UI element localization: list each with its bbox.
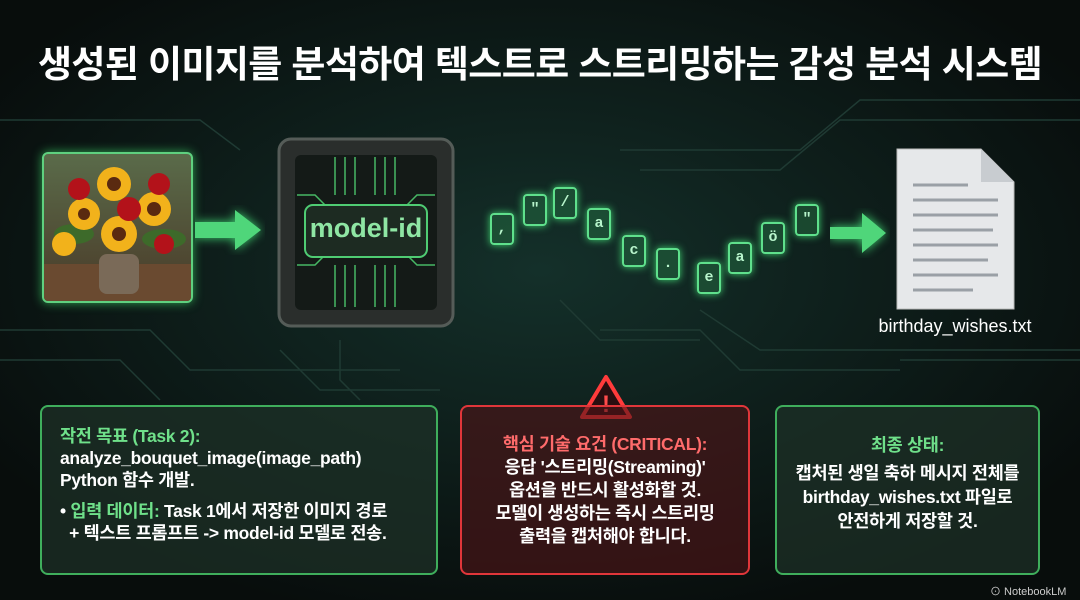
panel: critical requirement: 모델이 생성하는 즉시 스트리밍 [495,503,715,523]
panel: critical requirement [460,405,750,575]
arrow: image to chip [195,206,265,254]
panel: critical requirement: 옵션을 반드시 활성화할 것. [509,480,701,500]
stream tiles: " [530,201,540,218]
stream tiles [484,181,825,300]
footer: NotebookLM: ⊙ NotebookLM [990,586,1066,598]
panel: critical requirement: 응답 '스트리밍(Streaming)' [504,457,706,477]
stream tiles: a [594,215,604,232]
stream tiles: c [629,242,638,259]
panel: final state: 최종 상태: [871,435,944,455]
panel: task goal: Python 함수 개발. [60,470,194,490]
stream tiles: " [802,211,812,228]
arrow: stream to document [830,209,890,257]
chip: model-id: model-id [310,213,422,243]
stream tiles: , [497,220,506,237]
panel: task goal: • 입력 데이터: Task 1에서 저장한 이미지 경로 [60,501,387,521]
filename label: birthday_wishes.txt [878,316,1032,336]
chip: model-id [278,138,454,328]
panel: task goal: 작전 목표 (Task 2): [60,426,200,446]
panel: critical requirement: 핵심 기술 요건 (CRITICAL): [503,434,707,454]
stream tiles: . [663,255,672,272]
panel: task goal: analyze_bouquet_image(image_path) [60,448,361,468]
panel: final state: 안전하게 저장할 것. [837,511,978,531]
stream tiles: ö [768,229,778,246]
stream tiles: e [704,269,714,286]
panel: critical requirement: 출력을 캡처해야 합니다. [519,526,691,546]
icon: text document [896,148,1014,310]
icon: warning [580,374,632,419]
panel: task goal: + 텍스트 프롬프트 -> model-id 모델로 전송. [69,523,387,543]
title: 생성된 이미지를 분석하여 텍스트로 스트리밍하는 감성 분석 시스템 [38,44,1042,85]
image: flower bouquet [42,152,193,303]
icon: warning: ! [602,391,610,418]
panel: final state: 캡처된 생일 축하 메시지 전체를 [796,463,1019,483]
panel: task goal [40,405,438,575]
panel: final state [775,405,1040,575]
stream tiles: / [560,194,570,211]
stream tiles: a [735,249,744,266]
panel: final state: birthday_wishes.txt 파일로 [803,487,1012,507]
